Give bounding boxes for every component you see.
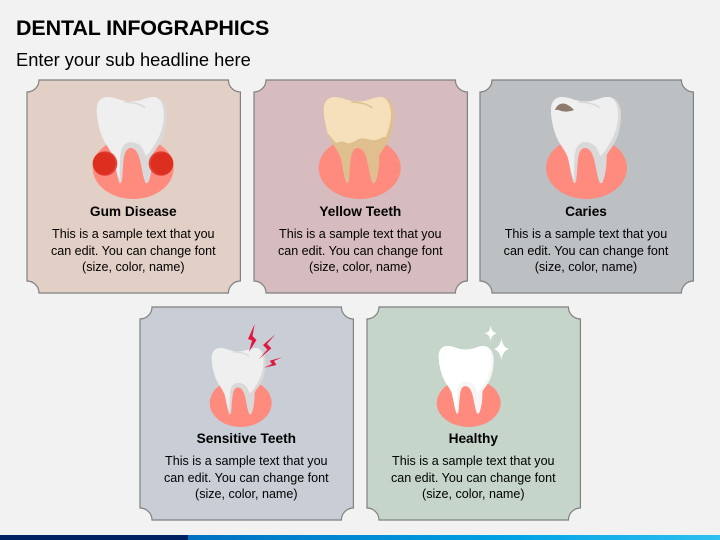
heading: Gum Disease <box>90 204 177 219</box>
icon: yellow tooth <box>319 97 401 199</box>
sub headline: Enter your sub headline here <box>16 49 251 70</box>
title: DENTAL INFOGRAPHICS <box>16 16 269 40</box>
body text: This is a sample text that you <box>165 454 328 468</box>
body text: (size, color, name) <box>309 260 412 274</box>
body text <box>278 227 443 274</box>
body text: (size, color, name) <box>82 260 185 274</box>
body text: (size, color, name) <box>195 487 298 501</box>
body text <box>164 454 329 501</box>
icon: gum disease tooth <box>93 97 174 199</box>
panel: sensitive teeth <box>139 306 354 521</box>
body text <box>391 454 556 501</box>
icon: caries tooth <box>546 97 627 199</box>
body text: can edit. You can change font <box>51 244 216 258</box>
body text: can edit. You can change font <box>391 471 556 485</box>
heading: Sensitive Teeth <box>197 431 296 446</box>
body text: can edit. You can change font <box>504 244 668 258</box>
panel: caries <box>479 79 694 294</box>
panel: gum disease <box>26 79 241 294</box>
body text: This is a sample text that you <box>279 227 442 241</box>
body text <box>504 227 668 274</box>
body text: (size, color, name) <box>535 260 637 274</box>
heading: Yellow Teeth <box>319 204 401 219</box>
body text: This is a sample text that you <box>505 227 667 241</box>
body text: (size, color, name) <box>422 487 525 501</box>
panel: healthy <box>366 306 581 521</box>
icon: sensitive tooth <box>210 324 282 427</box>
footer bar <box>0 535 720 540</box>
body text: can edit. You can change font <box>278 244 443 258</box>
panel: yellow teeth <box>253 79 468 294</box>
body text <box>51 227 216 274</box>
body text: can edit. You can change font <box>164 471 329 485</box>
icon: healthy tooth <box>437 325 509 427</box>
heading: Healthy <box>449 431 498 446</box>
heading: Caries <box>565 204 607 219</box>
body text: This is a sample text that you <box>52 227 215 241</box>
body text: This is a sample text that you <box>392 454 555 468</box>
